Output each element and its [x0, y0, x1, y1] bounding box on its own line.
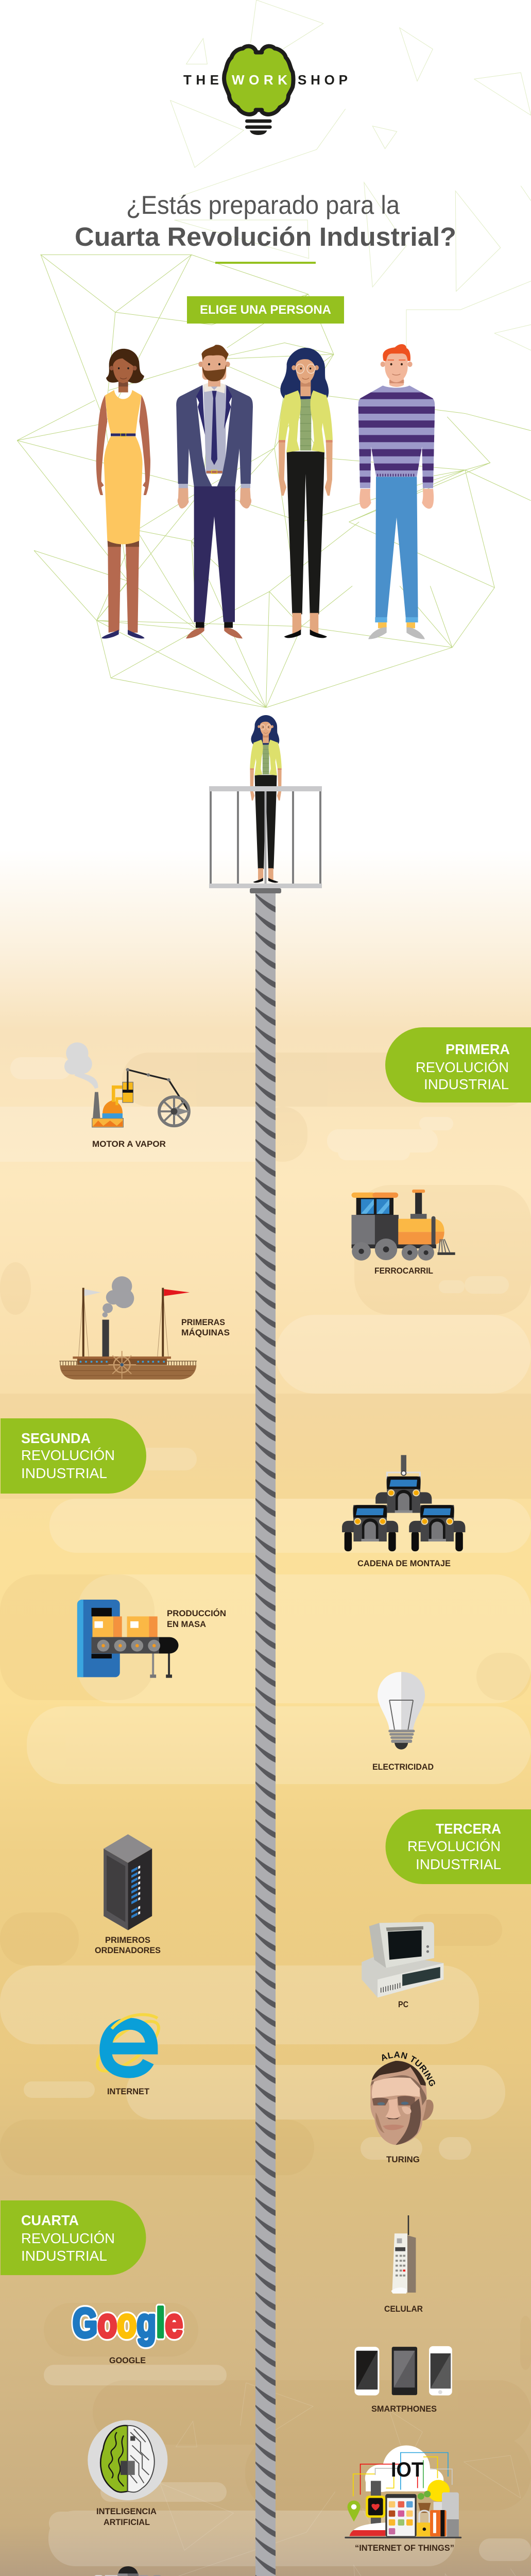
- panel: tercera revolucion: REVOLUCIÓN: [407, 1838, 501, 1854]
- icon: internet of things: [345, 2445, 461, 2538]
- label: celular: CELULAR: [384, 2304, 423, 2314]
- network lines top (green): [17, 0, 531, 707]
- panel: segunda revolucion: SEGUNDA: [21, 1430, 91, 1446]
- icon: steam ship: [59, 1276, 197, 1380]
- panel: primera revolucion: REVOLUCIÓN: [416, 1059, 509, 1075]
- label: primeros ordenadores: [95, 1935, 161, 1955]
- panel: cuarta revolucion: [1, 2200, 146, 2275]
- label: inteligencia artificial: ARTIFICIAL: [104, 2517, 150, 2527]
- label: internet: INTERNET: [107, 2087, 150, 2096]
- logo top: THE: [183, 72, 219, 88]
- icon: locomotive: [351, 1190, 455, 1261]
- label: cadena de montaje: CADENA DE MONTAJE: [357, 1558, 451, 1568]
- label: primeras maquinas: MÁQUINAS: [181, 1328, 230, 1337]
- panel: primera revolucion: [385, 1027, 531, 1103]
- person: man in suit: [176, 345, 253, 638]
- panel: cuarta revolucion: INDUSTRIAL: [21, 2248, 107, 2264]
- title: ¿Estás preparado para la: [126, 191, 400, 219]
- button: elige una persona: ELIGE UNA PERSONA: [200, 303, 331, 317]
- network lines middle (white): [7, 2383, 521, 2576]
- icon: light bulb: [378, 1672, 425, 1750]
- panel: segunda revolucion: INDUSTRIAL: [21, 1465, 107, 1481]
- title underline: [215, 262, 316, 264]
- person: woman with jacket: [279, 348, 333, 638]
- label: electricidad: ELECTRICIDAD: [372, 1762, 434, 1772]
- label: produccion en masa: PRODUCCIÓN: [167, 1608, 226, 1618]
- striped pole: [250, 893, 282, 2576]
- panel: tercera revolucion: TERCERA: [436, 1821, 501, 1837]
- icon: internet browser: [90, 2013, 166, 2079]
- icon: steam engine: [64, 1042, 190, 1127]
- icon: brick cell phone: [391, 2215, 416, 2294]
- label: internet of things: “INTERNET OF THINGS”: [355, 2543, 454, 2553]
- icon: google: Google: [73, 2300, 183, 2346]
- icon: server rack: [104, 1834, 152, 1930]
- label: produccion en masa: [167, 1608, 226, 1629]
- icon: desktop pc: [362, 1922, 443, 1997]
- icon: robot: [93, 2566, 162, 2576]
- title: [75, 191, 456, 251]
- panel: cuarta revolucion: REVOLUCIÓN: [21, 2230, 115, 2246]
- panel: tercera revolucion: [385, 1809, 531, 1884]
- panel: primera revolucion: INDUSTRIAL: [424, 1076, 509, 1092]
- label: smartphones: SMARTPHONES: [371, 2404, 437, 2414]
- button: elige una persona: [187, 296, 344, 324]
- label: primeros ordenadores: PRIMEROS: [105, 1935, 150, 1945]
- label: ferrocarril: FERROCARRIL: [374, 1266, 433, 1276]
- icon: smartphones: [354, 2346, 452, 2396]
- logo top: [183, 46, 348, 135]
- label: primeras maquinas: PRIMERAS: [181, 1317, 225, 1327]
- icon: internet of things: IOT: [391, 2459, 423, 2481]
- person: man in striped sweater: [357, 344, 436, 639]
- label: primeros ordenadores: ORDENADORES: [95, 1945, 161, 1955]
- panel: primera revolucion: PRIMERA: [446, 1041, 510, 1057]
- panel: segunda revolucion: [1, 1418, 146, 1494]
- label: motor a vapor: MOTOR A VAPOR: [92, 1139, 166, 1149]
- label: primeras maquinas: [181, 1317, 230, 1337]
- label: turing: TURING: [386, 2155, 420, 2164]
- title: Cuarta Revolución Industrial?: [75, 222, 456, 251]
- icon: assembly line cars: [342, 1455, 465, 1551]
- person: woman in yellow dress: [96, 349, 150, 638]
- icon: alan turing portrait: ALAN TURING: [382, 2052, 435, 2087]
- label: inteligencia artificial: INTELIGENCIA: [96, 2506, 157, 2516]
- panel: cuarta revolucion: CUARTA: [21, 2212, 79, 2228]
- background clouds: [0, 1053, 531, 2566]
- label: inteligencia artificial: [96, 2506, 157, 2527]
- panel: segunda revolucion: REVOLUCIÓN: [21, 1447, 115, 1463]
- label: produccion en masa: EN MASA: [167, 1619, 206, 1629]
- selected woman on platform: [250, 715, 282, 883]
- logo top: SHOP: [298, 72, 348, 88]
- label: pc: PC: [398, 1999, 408, 2009]
- icon: google: Google: [73, 2300, 183, 2346]
- icon: alan turing portrait: [370, 2052, 435, 2145]
- platform railing: [209, 786, 322, 893]
- icon: conveyor: [77, 1600, 179, 1678]
- label: google: GOOGLE: [109, 2355, 146, 2365]
- panel: tercera revolucion: INDUSTRIAL: [416, 1856, 501, 1872]
- logo top: WORK: [232, 72, 287, 88]
- icon: ai brain: [88, 2420, 167, 2500]
